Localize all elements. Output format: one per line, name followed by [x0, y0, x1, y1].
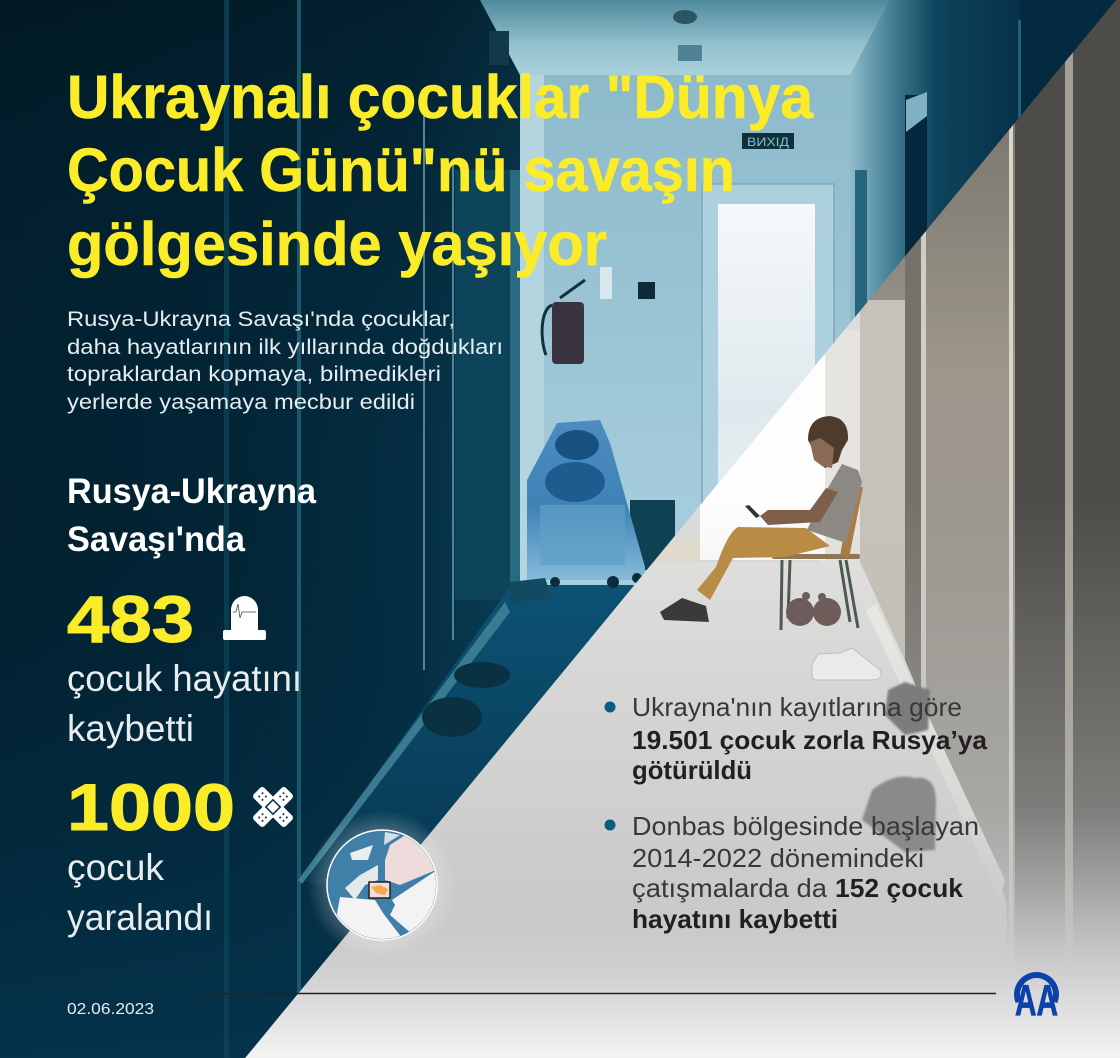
title: gölgesinde yaşıyor	[67, 210, 607, 278]
trousers	[697, 527, 830, 600]
bullet: Donbas deaths: çatışmalarda da	[632, 873, 828, 903]
title	[67, 63, 814, 278]
subheading	[67, 472, 317, 559]
icon: crossed bandages	[241, 775, 305, 839]
icon: gravestone	[223, 596, 266, 640]
subheading: Savaşı'nda	[67, 520, 246, 559]
bullet: Donbas deaths: 2014-2022 dönemindeki	[632, 843, 924, 873]
slippers	[786, 592, 841, 626]
statistic: children killed: çocuk hayatını	[67, 658, 302, 699]
subheading: Rusya-Ukrayna	[67, 472, 317, 511]
head	[808, 416, 848, 468]
bullet: deported children	[604, 692, 988, 785]
bullet: deported children: Ukrayna'nın kayıtlarına göre	[632, 692, 962, 722]
intro text: yerlerde yaşamaya mecbur edildi	[67, 390, 415, 414]
intro text: Rusya-Ukrayna Savaşı'nda çocuklar,	[67, 307, 455, 331]
bullet: Donbas deaths	[604, 811, 979, 934]
bullet: Donbas deaths: 152 çocuk	[835, 873, 964, 903]
title: Çocuk Günü"nü savaşın	[67, 136, 735, 204]
phone	[745, 505, 760, 518]
intro text: daha hayatlarının ilk yıllarında doğdukları	[67, 335, 503, 359]
chair	[772, 487, 863, 630]
intro text: topraklardan kopmaya, bilmedikleri	[67, 362, 441, 386]
statistic: children wounded: 1000	[67, 770, 235, 844]
bullet: deported children: 19.501 çocuk zorla Rusya’ya	[632, 725, 988, 755]
photo: upper left duotone teal corridor: ВИХІД	[747, 135, 789, 149]
logo: AA	[1015, 975, 1058, 1025]
bullet: Donbas deaths: Donbas bölgesinde başlayan	[632, 811, 979, 841]
title: Ukraynalı çocuklar "Dünya	[67, 63, 814, 131]
bullet: Donbas deaths: hayatını kaybetti	[632, 904, 838, 934]
logo: AA: AA	[1015, 976, 1058, 1025]
sneaker	[812, 648, 881, 680]
intro text	[67, 307, 503, 414]
date: 02.06.2023	[67, 1001, 154, 1018]
illustration: boy sitting on a chair with a phone	[660, 416, 881, 680]
sandal	[660, 598, 709, 622]
arm	[760, 488, 838, 525]
statistic: children wounded	[67, 770, 235, 938]
statistic: children killed	[67, 582, 302, 749]
shirt	[807, 464, 862, 543]
statistic: children killed: kaybetti	[67, 708, 194, 749]
statistic: children wounded: çocuk	[67, 847, 165, 888]
statistic: children killed: 483	[67, 582, 194, 656]
bullet: deported children: götürüldü	[632, 755, 752, 785]
locator globe	[310, 813, 442, 944]
statistic: children wounded: yaralandı	[67, 897, 213, 938]
